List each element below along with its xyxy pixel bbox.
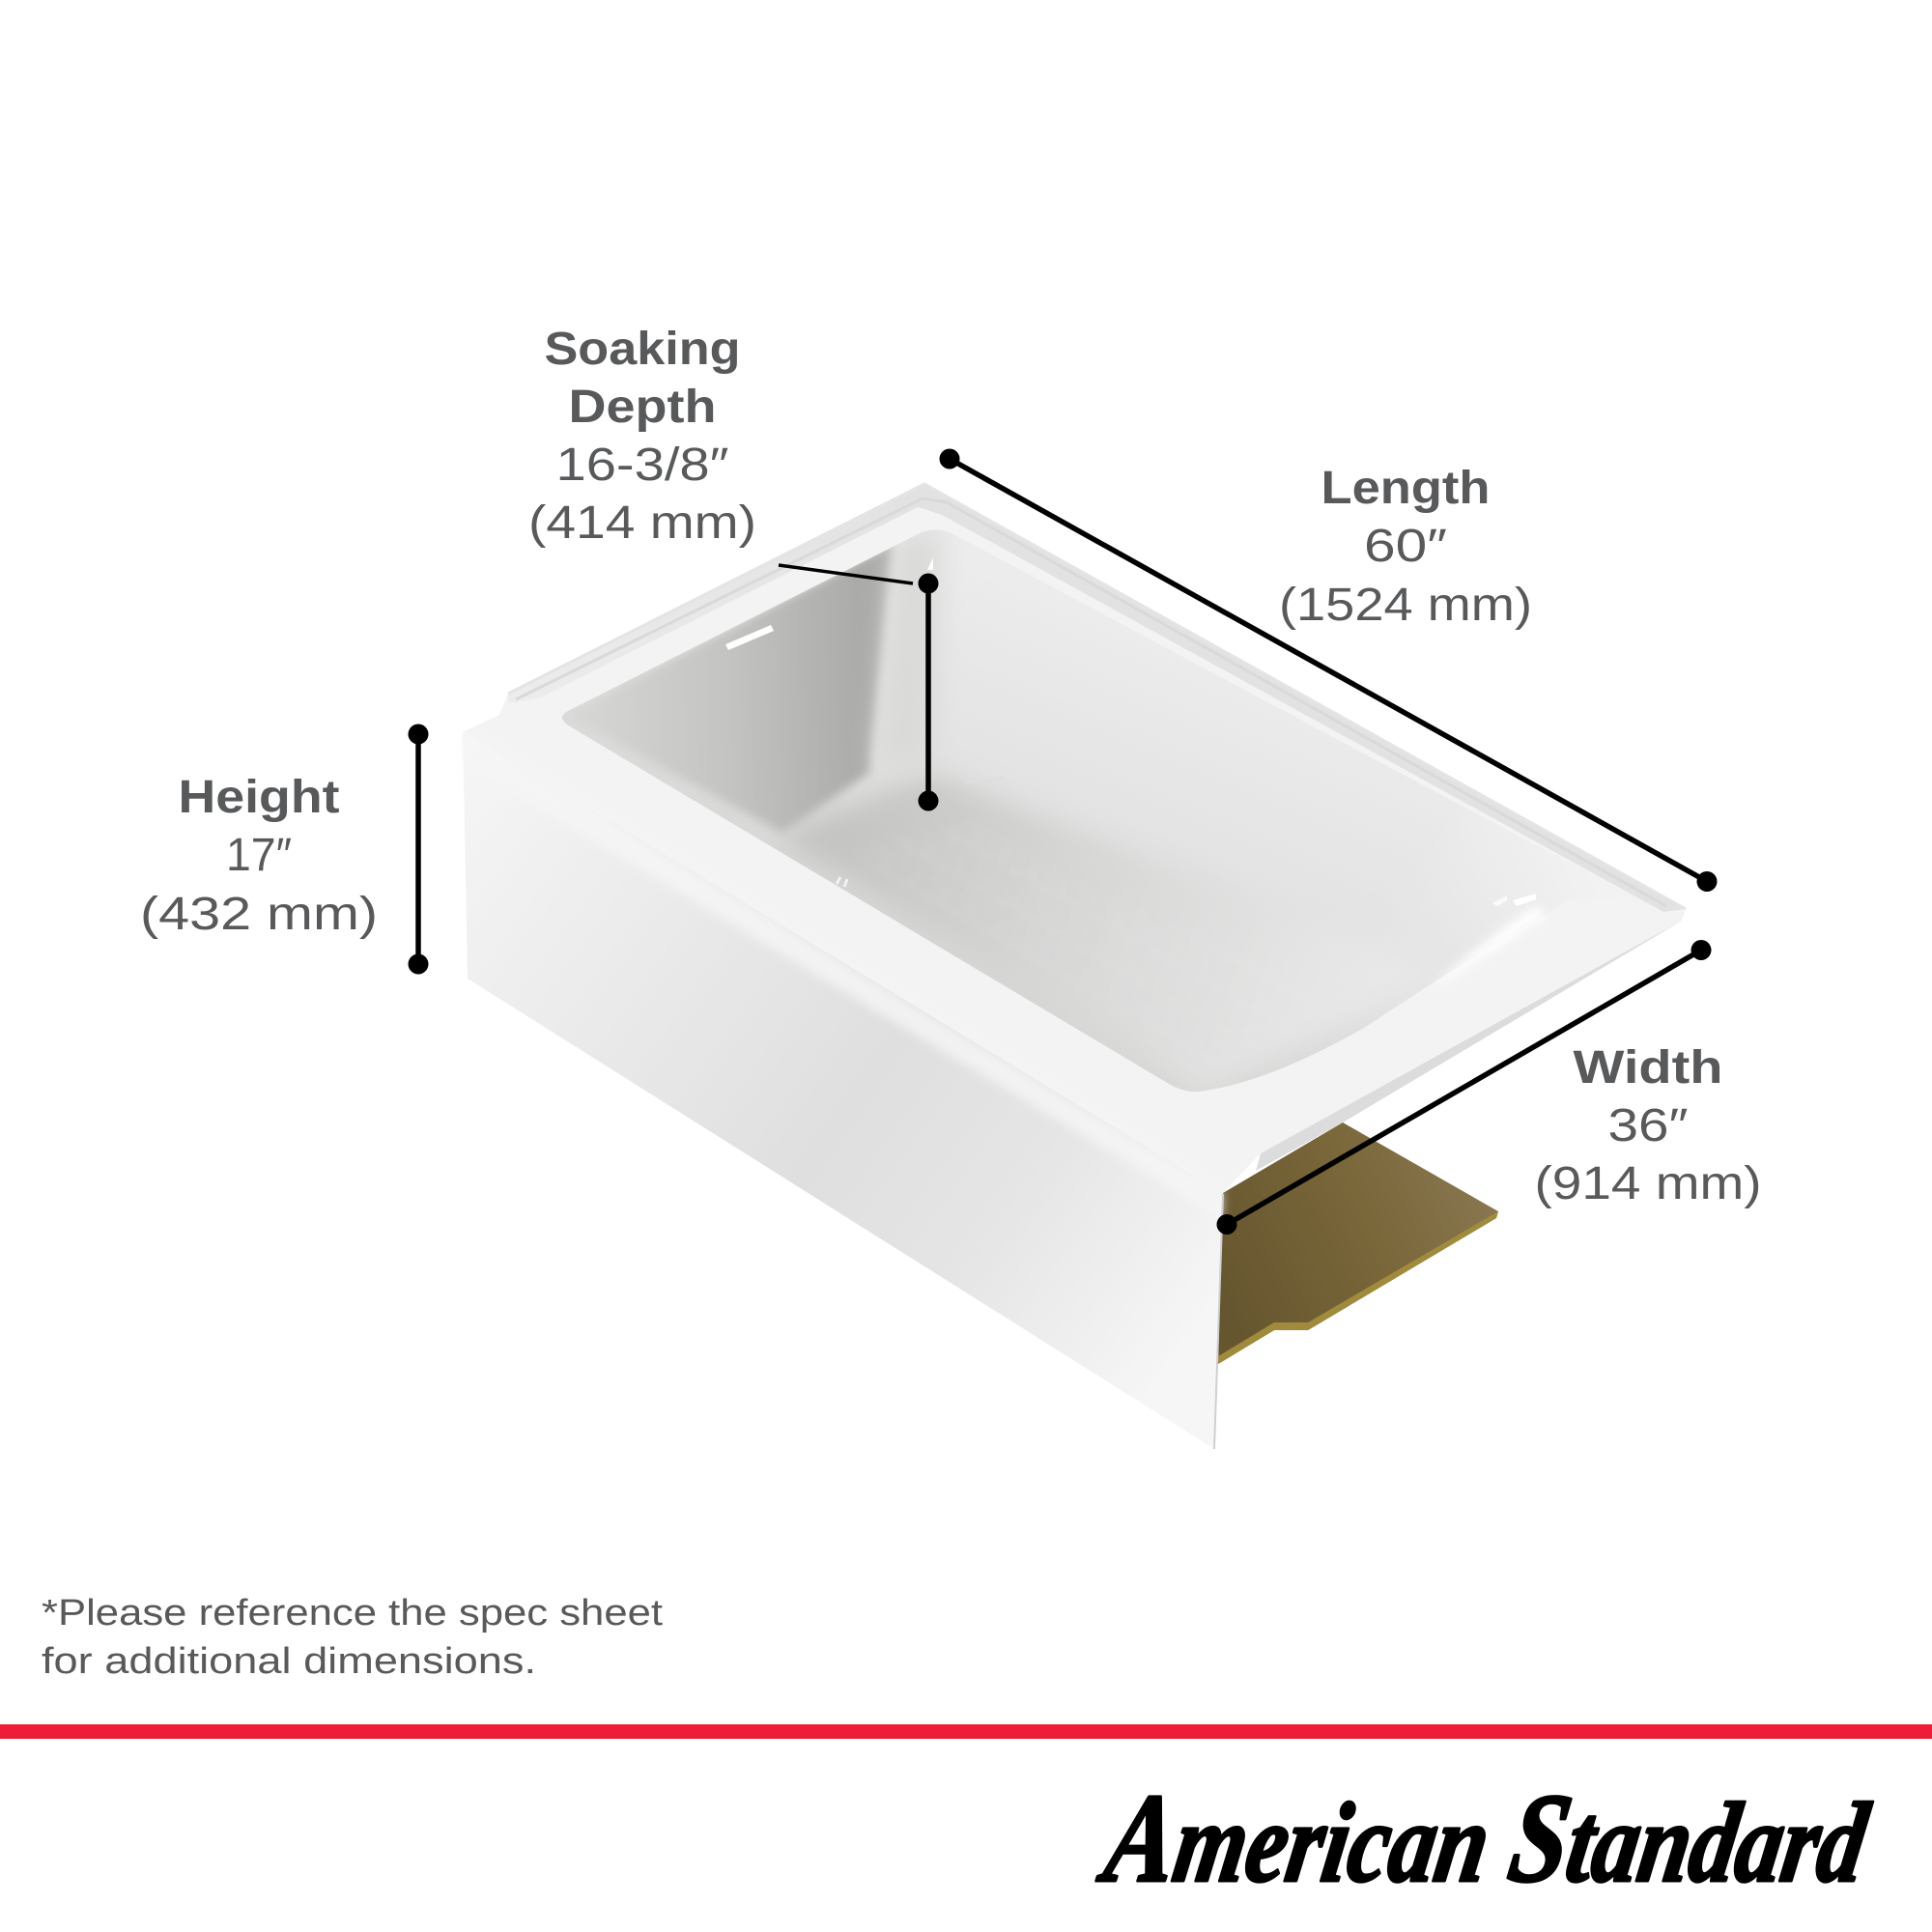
width label: (914 mm)	[1534, 1158, 1762, 1209]
height label: Height	[178, 772, 340, 823]
length label: 60″	[1364, 521, 1447, 572]
back flange	[508, 484, 1686, 912]
width line	[1217, 940, 1712, 1235]
width label: Width	[1573, 1042, 1723, 1094]
overflow slit	[725, 625, 774, 650]
bathtub illustration	[463, 484, 1700, 1449]
flange inner step	[516, 498, 1666, 906]
footnote: for additional dimensions.	[42, 1641, 536, 1682]
footnote: *Please reference the spec sheet	[42, 1593, 664, 1634]
height label	[140, 772, 378, 940]
soaking depth label	[528, 324, 756, 549]
soaking depth label: 16-3/8″	[556, 440, 729, 491]
left basin wall	[565, 543, 894, 833]
length line	[939, 448, 1718, 892]
end wall highlights	[1430, 894, 1546, 990]
dimension: width	[1217, 940, 1762, 1235]
length label	[1279, 463, 1532, 631]
tub deck	[463, 484, 1686, 1193]
footnote	[42, 1593, 664, 1682]
drain glint	[837, 877, 847, 887]
length label: (1524 mm)	[1279, 580, 1532, 631]
basin	[562, 529, 1501, 1092]
dimension: length	[939, 448, 1718, 892]
soaking depth lines	[779, 565, 939, 811]
front panel right edge	[1214, 1194, 1223, 1449]
rim underside	[1256, 921, 1682, 1171]
floor glint	[966, 778, 1005, 782]
height label: 17″	[226, 830, 292, 881]
width label: 36″	[1607, 1100, 1689, 1151]
overflow glint	[927, 557, 933, 570]
floor mat texture	[850, 821, 1343, 1082]
gold mounting plate	[1218, 1122, 1498, 1364]
corner highlight	[874, 526, 942, 773]
dimension: soaking depth	[528, 324, 939, 811]
soaking depth label: Soaking	[545, 324, 740, 375]
logo: American Standard: American Standard	[1092, 1768, 1879, 1909]
length label: Length	[1321, 463, 1490, 514]
front panel top highlight	[463, 731, 1223, 1219]
soaking depth label: Depth	[568, 382, 717, 433]
basin floor	[788, 772, 1364, 1084]
soaking depth label: (414 mm)	[528, 497, 756, 549]
height line	[408, 724, 429, 974]
basin end wall	[1559, 874, 1640, 902]
width label	[1534, 1042, 1762, 1209]
flange ridge	[508, 484, 1686, 909]
dimension: height	[140, 724, 429, 974]
front panel	[463, 731, 1223, 1449]
red divider bar	[0, 1724, 1932, 1739]
height label: (432 mm)	[140, 889, 378, 940]
